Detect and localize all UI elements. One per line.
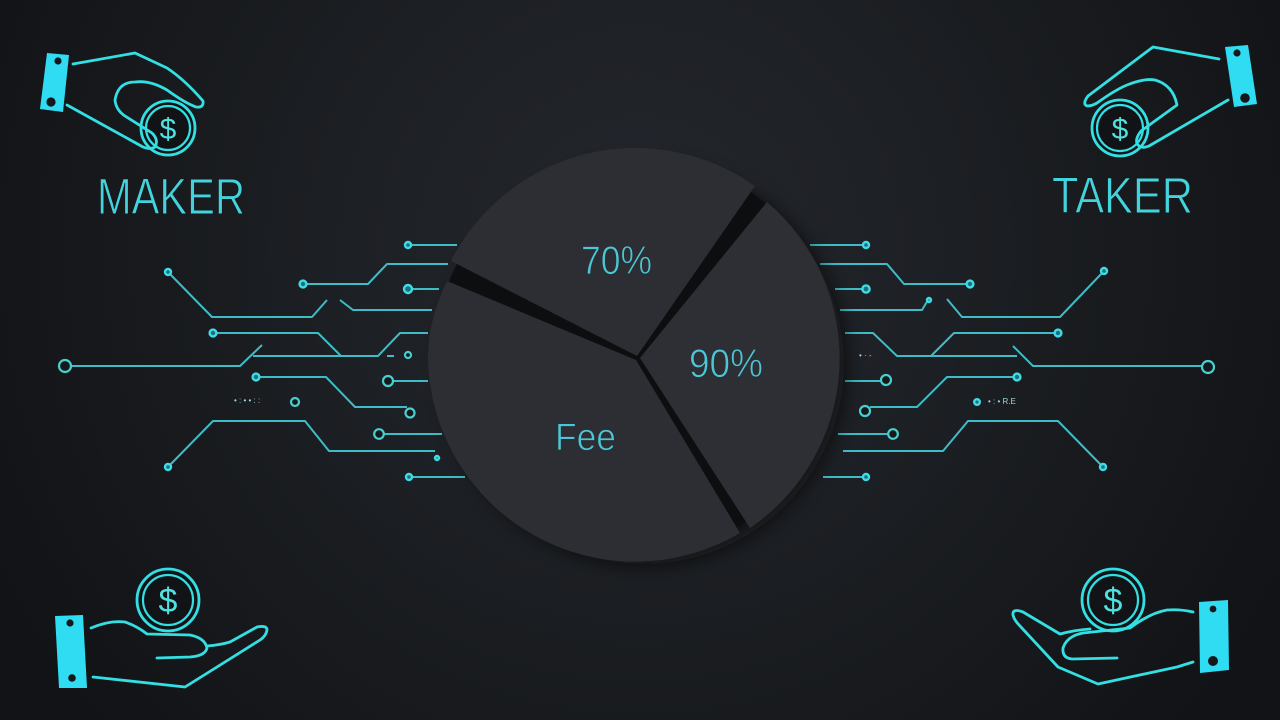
icon: maker hand holding coin: $ [159,582,178,620]
icon: maker hand placing coin [40,53,203,155]
circuit lines: right: • · - [859,351,872,360]
label: 90%: 90% [689,342,763,386]
pie chart [428,148,844,564]
icon: taker hand holding coin [1013,569,1229,684]
circuit lines: right: • : • R.E [988,397,1016,406]
icon: taker hand picking coin [1085,45,1257,156]
heading: MAKER: MAKER [97,168,245,225]
slice: 90% [640,202,840,528]
icon: taker hand holding coin: $ [1104,582,1123,620]
icon: maker hand placing coin: $ [160,113,177,146]
icon: maker hand holding coin [55,569,267,688]
slice: Fee [428,281,740,562]
slice: 70% [452,148,755,356]
circuit lines: left [59,242,465,480]
heading: TAKER: TAKER [1052,167,1193,224]
circuit lines: right [810,242,1214,480]
label: 70%: 70% [581,239,652,283]
label: Fee: Fee [555,417,616,459]
circuit lines: left: • : • • : : [234,396,260,405]
icon: taker hand picking coin: $ [1112,113,1129,146]
